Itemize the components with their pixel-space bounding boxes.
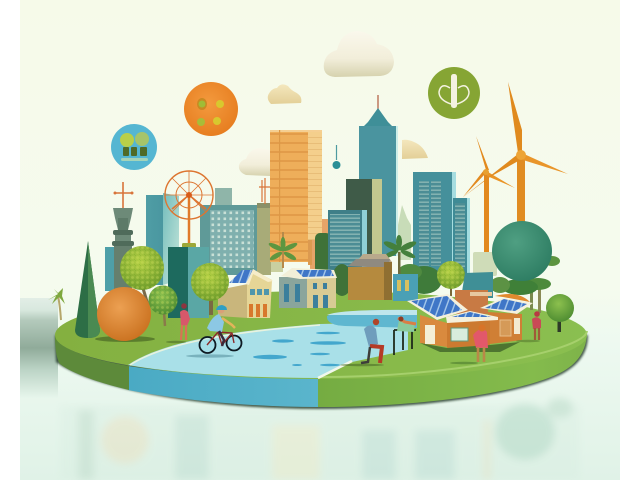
bicycle wheels xyxy=(200,337,216,353)
distant buildings xyxy=(105,95,470,291)
sphere: orange xyxy=(95,287,155,342)
building: low teal left xyxy=(105,247,117,291)
house: small teal xyxy=(393,274,418,301)
antenna: orange cross xyxy=(259,178,271,204)
building: tall teal xyxy=(359,95,398,256)
roof left xyxy=(407,294,468,320)
ferris wheel xyxy=(165,171,213,248)
person: right xyxy=(516,311,541,342)
circle: blue badge xyxy=(111,124,157,170)
building: orange tower xyxy=(270,130,322,265)
palms: right xyxy=(490,256,560,313)
building: small teal xyxy=(453,198,470,274)
platform xyxy=(55,291,588,409)
side: blue xyxy=(128,366,318,407)
teal droplet xyxy=(332,145,340,169)
mid trees xyxy=(332,264,442,296)
tree: by yellow house xyxy=(191,263,229,315)
teal podium xyxy=(168,247,209,318)
side: green left xyxy=(55,335,129,390)
middle wall xyxy=(447,318,490,348)
palm: left of platform xyxy=(48,288,65,320)
bush: small left xyxy=(148,286,178,326)
cyclist xyxy=(186,305,242,358)
river xyxy=(128,322,408,378)
platform shadow xyxy=(55,335,588,409)
building: pale back xyxy=(271,222,283,272)
palm: centre xyxy=(383,235,417,278)
cloud: mid xyxy=(239,148,270,176)
palm: near orange tower xyxy=(268,232,298,268)
cloud: tan right xyxy=(402,140,428,159)
roof centre xyxy=(446,311,498,323)
doors xyxy=(249,304,267,317)
wind turbine: large xyxy=(462,82,568,224)
decorative tower xyxy=(112,182,134,291)
building: dotted teal xyxy=(200,205,257,275)
wind turbine: small xyxy=(463,136,515,254)
solar roof xyxy=(229,270,254,283)
base cylinder xyxy=(473,252,497,276)
roof right xyxy=(480,298,533,314)
circle: orange badge xyxy=(184,82,238,136)
building: teal left tower xyxy=(146,193,179,285)
house: brown xyxy=(348,254,392,300)
left wall xyxy=(420,315,447,347)
right wall xyxy=(488,312,522,344)
chimney block xyxy=(455,290,492,314)
building: teal faded back xyxy=(398,205,411,260)
circle: green badge xyxy=(428,67,480,119)
top surface xyxy=(55,291,587,379)
side wall xyxy=(218,284,248,318)
platform reflection xyxy=(60,398,580,480)
facade xyxy=(247,270,272,318)
bush: centre right xyxy=(437,261,465,296)
house: yellow xyxy=(218,269,273,318)
cloud: small tan top xyxy=(268,84,301,104)
building: olive xyxy=(257,203,271,275)
building: hedge wall xyxy=(315,233,331,273)
foundation shadow xyxy=(420,342,520,352)
person: front right xyxy=(450,324,488,364)
building: big teal xyxy=(413,172,456,272)
tree: cone xyxy=(75,241,100,338)
bush: big left xyxy=(120,246,164,305)
building: teal striped xyxy=(328,210,367,272)
person: at table xyxy=(394,316,416,355)
river ripples xyxy=(253,332,346,366)
tree: small right xyxy=(546,294,574,332)
house: blue-windowed xyxy=(279,268,337,308)
side: green right xyxy=(318,331,587,407)
windows xyxy=(250,289,269,295)
cloud: large xyxy=(324,31,394,77)
person: left standing xyxy=(166,303,190,343)
building: dark olive xyxy=(346,179,382,259)
raised pool xyxy=(327,310,417,328)
building: grey back xyxy=(215,188,232,210)
building: orange annex xyxy=(310,219,328,272)
person: crouching xyxy=(340,319,384,366)
green globe xyxy=(492,221,552,281)
house: solar xyxy=(407,290,533,352)
rider xyxy=(207,314,224,332)
house: teal back right xyxy=(461,272,493,298)
